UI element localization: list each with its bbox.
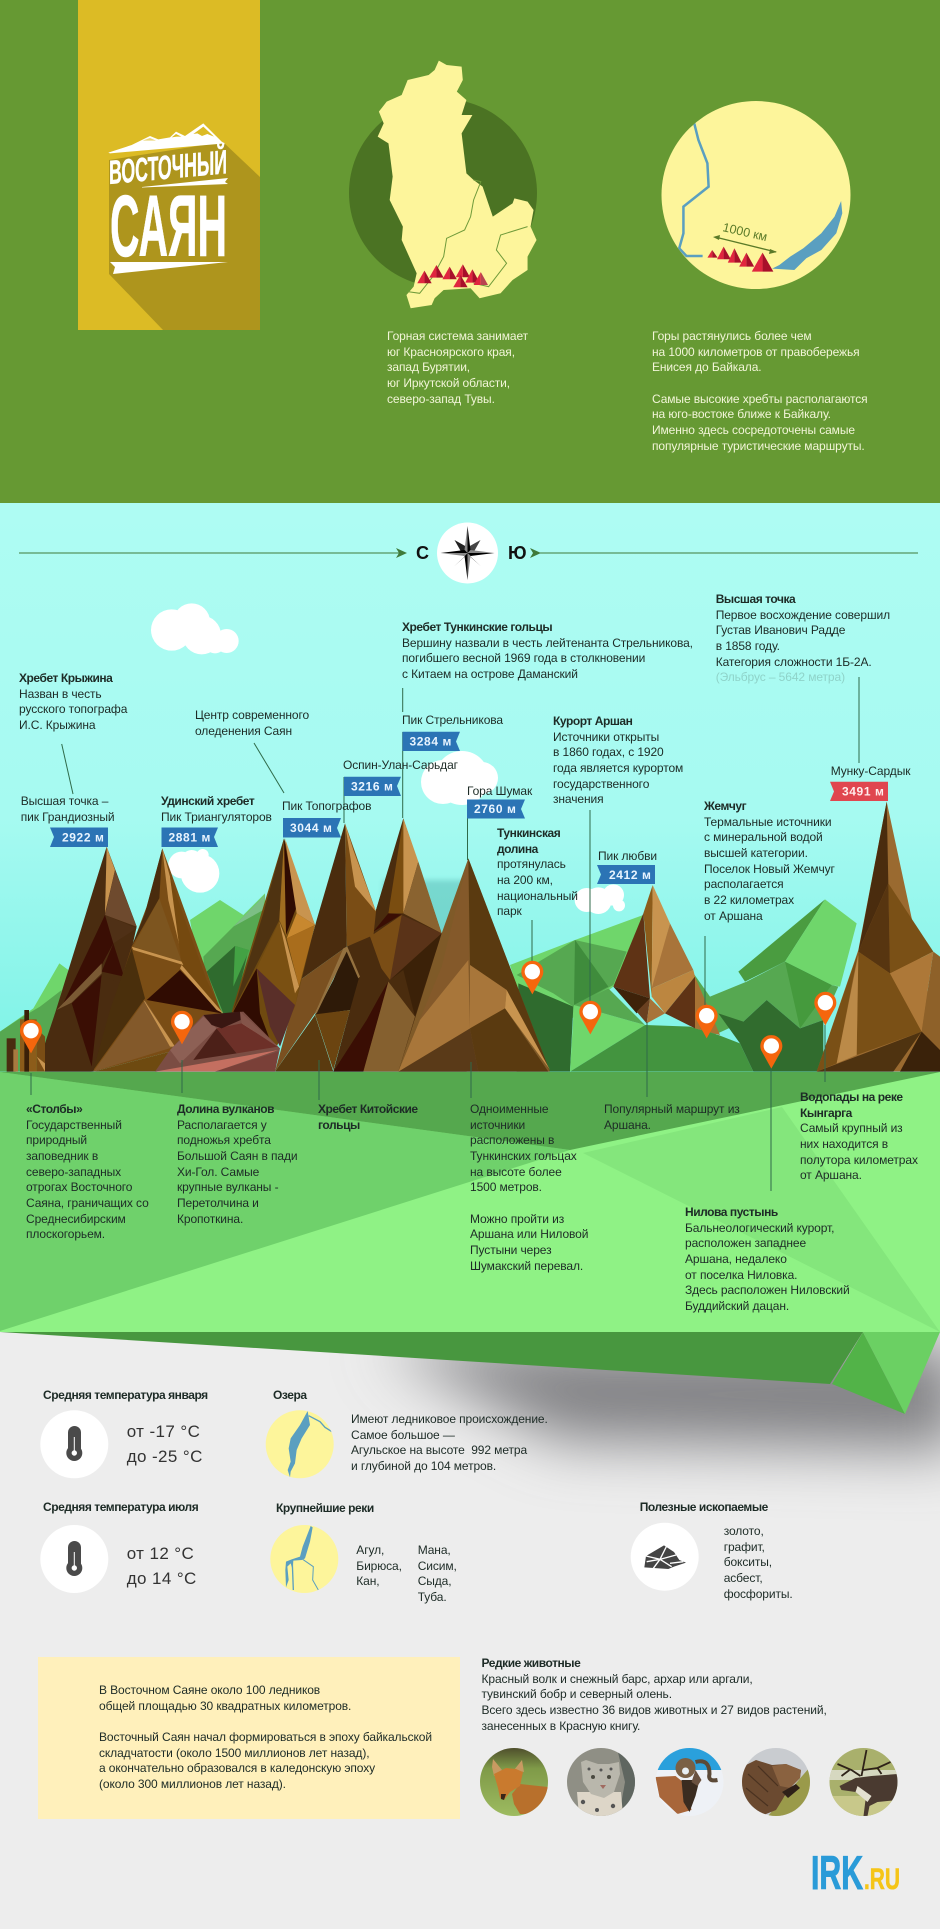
label: Грандиозный: пик Грандиозный — [21, 810, 114, 824]
text: Хребет Тункинские гольцы: с Китаем на острове Даманский — [402, 667, 578, 681]
text: Долина вулканов: Хи-Гол. Самые — [177, 1165, 259, 1179]
icon: lake map — [266, 1410, 334, 1478]
text: Жемчуг: высшей категории. — [704, 846, 808, 860]
text: редкие животные — [482, 1656, 827, 1733]
text: Тункинская долина: национальный — [497, 889, 578, 903]
text: Столбы: плоскогорьем. — [26, 1227, 105, 1241]
text: Водопады на реке Кынгарга — [800, 1090, 918, 1182]
values: январь: до -25 °C — [127, 1447, 203, 1466]
text: редкие животные: Всего здесь известно 36 видов животных и 27 видов растений, — [482, 1703, 827, 1717]
icon: compass rose — [437, 522, 498, 584]
text: Одноименные источники: Аршана или Ниловой — [470, 1227, 588, 1241]
photo: snow leopard — [567, 1748, 635, 1816]
label: Мунку-Сардык: Мунку-Сардык — [831, 764, 910, 778]
text: Хребет Тункинские гольцы: Вершину назвали в честь лейтенанта Стрельникова, — [402, 636, 693, 650]
header text: location: юг Красноярского края, — [387, 345, 515, 359]
icon: route map from Yenisei to Baikal — [662, 101, 850, 289]
header text: location: запад Бурятии, — [387, 360, 470, 374]
text: Одноименные источники: Пустыни через — [470, 1243, 552, 1257]
text: ледники: В Восточном Саяне около 100 ледников — [99, 1683, 320, 1697]
text: Нилова пустынь: Аршана, недалеко — [685, 1252, 787, 1266]
list: ископаемые: графит, — [724, 1540, 765, 1554]
text: Столбы: Саяна, граничащих со — [26, 1196, 149, 1210]
text: Тункинская долина — [497, 826, 578, 918]
list: реки 2: Сыда, — [418, 1574, 452, 1588]
text: Жемчуг: с минеральной водой — [704, 830, 823, 844]
values: январь: от -17 °C — [127, 1422, 200, 1441]
list: ископаемые: золото, — [724, 1524, 764, 1538]
label: Оспин-Улан-Сарьдаг: Оспин-Улан-Сарьдаг — [343, 758, 458, 772]
text: Центр оледенения — [195, 708, 309, 738]
text: Нилова пустынь: расположен западнее — [685, 1236, 806, 1250]
text: Нилова пустынь: Здесь расположен Ниловский — [685, 1283, 850, 1297]
text: озера: Самое большое — — [351, 1428, 455, 1442]
text: Хребет Крыжина: русского топографа — [19, 702, 127, 716]
text: Одноименные источники — [470, 1102, 588, 1273]
text: ледники: складчатости (около 1500 миллионов лет назад), — [99, 1746, 369, 1760]
text: Курорт Аршан: в 1860 годах, с 1920 — [553, 745, 664, 759]
text: ледники: а окончательно образовался в каледонскую эпоху — [99, 1761, 375, 1775]
text: Одноименные источники: расположены в — [470, 1133, 554, 1147]
text: Водопады на реке Кынгарга: Кынгарга — [800, 1106, 852, 1120]
icon: route map from Yenisei to Baikal: 1000 км — [721, 220, 769, 244]
header text: location: юг Иркутской области, — [387, 376, 510, 390]
list: реки 1: Агул, — [356, 1543, 384, 1557]
label: Удинский хребет — [161, 794, 272, 824]
text: ледники: общей площадью 30 квадратных километров. — [99, 1699, 351, 1713]
text: Столбы: Государственный — [26, 1118, 122, 1132]
text: Популярный маршрут: Популярный маршрут из — [604, 1102, 740, 1116]
icon: thermometer July — [40, 1525, 108, 1593]
mountain: Пик Стрельникова — [333, 818, 467, 1072]
photo: reindeer — [830, 1748, 898, 1816]
height flag: 3044 м: 3044 м — [290, 821, 333, 835]
mountain: Пик Топографов — [232, 838, 315, 1047]
values: июль: до 14 °C — [127, 1568, 197, 1588]
list: реки 2 — [418, 1543, 457, 1604]
text: Одноименные источники: 1500 метров. — [470, 1180, 542, 1194]
text: Тункинская долина: долина — [497, 842, 538, 856]
panel: gold title banner — [78, 0, 260, 330]
header text: extent: популярные туристические маршруты. — [652, 439, 865, 453]
text: Жемчуг: располагается — [704, 877, 784, 891]
list: ископаемые: бокситы, — [724, 1555, 772, 1569]
text: редкие животные: Красный волк и снежный барс, архар или аргали, — [482, 1672, 753, 1686]
text: Высшая точка — [716, 592, 890, 684]
title logo: Восточный Саян — [108, 123, 228, 275]
logo: IRK.RU: IRK — [811, 1847, 863, 1900]
text: Водопады на реке Кынгарга: полутора километрах — [800, 1153, 918, 1167]
text: Курорт Аршан: года является курортом — [553, 761, 683, 775]
ground terrain panel — [0, 1072, 940, 1414]
text: Долина вулканов: подножья хребта — [177, 1133, 271, 1147]
text: Нилова пустынь — [685, 1205, 850, 1313]
height flag: 3216 м: 3216 м — [351, 780, 394, 794]
list: ископаемые: фосфориты. — [724, 1587, 793, 1601]
photo: beaver — [742, 1748, 810, 1816]
text: ледники: Восточный Саян начал формироваться в эпоху байкальской — [99, 1730, 432, 1744]
text: редкие животные: тувинский бобр и северный олень. — [482, 1687, 672, 1701]
text: Жемчуг: Жемчуг — [704, 799, 746, 813]
compass direction line — [19, 548, 918, 558]
text: Жемчуг — [704, 799, 835, 923]
label: Пик любви: Пик любви — [598, 849, 657, 863]
text: Нилова пустынь: Бальнеологический курорт, — [685, 1221, 834, 1235]
height flag: 2412 м — [597, 865, 655, 884]
compass letter south: Ю — [508, 543, 526, 563]
values: январь — [126, 1422, 203, 1466]
text: Жемчуг: от Аршана — [704, 909, 763, 923]
text: Водопады на реке Кынгарга: Водопады на реке — [800, 1090, 903, 1104]
mountain: Пик Триангуляторов — [93, 848, 223, 1072]
list: реки 1: Кан, — [356, 1574, 380, 1588]
text: озера: Агульское на высоте 992 метра — [351, 1443, 527, 1457]
icon: minerals rock — [631, 1523, 699, 1591]
text: Курорт Аршан: государственного — [553, 777, 649, 791]
text: озера: и глубиной до 104 метров. — [351, 1459, 496, 1473]
height flag: 2881 м — [162, 828, 218, 847]
list: ископаемые — [724, 1524, 793, 1601]
label: Удинский хребет: Пик Триангуляторов — [161, 810, 272, 824]
height flag: 2922 м — [50, 828, 108, 847]
text: Долина вулканов: крупные вулканы - — [177, 1180, 278, 1194]
text: Долина вулканов: Долина вулканов — [177, 1102, 274, 1116]
text: Хребет Тункинские гольцы: Хребет Тункинские гольцы — [402, 620, 552, 634]
list: реки 2: Мана, — [418, 1543, 451, 1557]
heading: озера: Озера — [273, 1388, 307, 1402]
list: реки 2: Туба. — [418, 1590, 447, 1604]
height flag: 2760 м: 2760 м — [474, 802, 517, 816]
list: ископаемые: асбест, — [724, 1571, 763, 1585]
text: ледники — [99, 1683, 432, 1791]
text: Центр оледенения: оледенения Саян — [195, 724, 292, 738]
text: Долина вулканов: Перетолчина и — [177, 1196, 259, 1210]
text: Нилова пустынь: Буддийский дацан. — [685, 1299, 789, 1313]
text: Столбы: «Столбы» — [26, 1102, 82, 1116]
photo: argali — [656, 1748, 724, 1816]
text: Водопады на реке Кынгарга: от Аршана. — [800, 1168, 862, 1182]
header text: extent: на 1000 километров от правобережья — [652, 345, 860, 359]
label: Гора Шумак: Гора Шумак — [467, 784, 532, 798]
text: Водопады на реке Кынгарга: них находится в — [800, 1137, 888, 1151]
text: Популярный маршрут — [604, 1102, 740, 1132]
header text: extent: Енисея до Байкала. — [652, 360, 762, 374]
text: Тункинская долина: Тункинская — [497, 826, 560, 840]
text: Тункинская долина: протянулась — [497, 857, 566, 871]
height flag: 3284 м — [402, 732, 460, 751]
text: Тункинская долина: парк — [497, 904, 522, 918]
text: Долина вулканов: Располагается у — [177, 1118, 267, 1132]
text: Водопады на реке Кынгарга: Самый крупный из — [800, 1121, 903, 1135]
text: Одноименные источники: Тункинских гольцах — [470, 1149, 577, 1163]
mountain: Мунку-Сардык — [817, 802, 940, 1072]
list: реки 2: Сисим, — [418, 1559, 457, 1573]
text: Курорт Аршан: Курорт Аршан — [553, 714, 632, 728]
text: Хребет Крыжина: Назван в честь — [19, 687, 102, 701]
heading: ископаемые: Полезные ископаемые — [640, 1500, 768, 1514]
text: Высшая точка: Категория сложности 1Б-2А. — [716, 655, 872, 669]
label: Пик Стрельникова: Пик Стрельникова — [402, 713, 503, 727]
text: Долина вулканов: Большой Саян в пади — [177, 1149, 298, 1163]
text: Высшая точка: Густав Иванович Радде — [716, 623, 845, 637]
mountain: Оспин-Улан-Сарьдаг — [275, 823, 387, 1072]
mountain: Пик любви — [613, 885, 720, 1035]
height flag: 2922 м: 2922 м — [62, 830, 105, 844]
height flag: 3491 м — [830, 782, 888, 801]
text: Жемчуг: в 22 километрах — [704, 893, 794, 907]
label: Пик Топографов: Пик Топографов — [282, 799, 371, 813]
text: Столбы — [26, 1102, 149, 1241]
text: Одноименные источники: на высоте более — [470, 1165, 562, 1179]
height flag: 2412 м: 2412 м — [609, 868, 652, 882]
text: Хребет Крыжина: Хребет Крыжина — [19, 671, 112, 685]
icon: thermometer January — [40, 1410, 108, 1478]
volcano — [155, 1012, 280, 1072]
title logo: Восточный Саян: ВОСТОЧНЫЙ — [109, 142, 227, 192]
text: Популярный маршрут: Аршана. — [604, 1118, 651, 1132]
text: Столбы: северо-западных — [26, 1165, 121, 1179]
text: Столбы: Среднесибирским — [26, 1212, 126, 1226]
header text: location — [387, 329, 528, 406]
text: Хребет Тункинские гольцы: погибшего весной 1969 года в столкновении — [402, 651, 645, 665]
text: Высшая точка: Первое восхождение совершил — [716, 608, 890, 622]
text: Одноименные источники: Шумакский перевал. — [470, 1259, 583, 1273]
header text: location: Горная система занимает — [387, 329, 528, 343]
text: Нилова пустынь: Нилова пустынь — [685, 1205, 778, 1219]
height flag: 3284 м: 3284 м — [410, 734, 452, 748]
text: Столбы: заповедник в — [26, 1149, 98, 1163]
text: Одноименные источники: источники — [470, 1118, 525, 1132]
text: Жемчуг: Поселок Новый Жемчуг — [704, 862, 835, 876]
panel: green header background — [0, 0, 940, 503]
text: Курорт Аршан: Источники открыты — [553, 730, 659, 744]
text: Курорт Аршан: значения — [553, 792, 604, 806]
header text: extent: Самые высокие хребты располагаются — [652, 392, 868, 406]
text: Тункинская долина: на 200 км, — [497, 873, 553, 887]
text: Высшая точка: Высшая точка — [716, 592, 795, 606]
label: Грандиозный — [21, 794, 114, 824]
list: реки 1: Бирюса, — [356, 1559, 402, 1573]
clouds — [151, 603, 625, 914]
text: САЯН — [110, 178, 227, 275]
header text: extent: на юго-востоке ближе к Байкалу. — [652, 407, 831, 421]
height flag: 3044 м — [283, 818, 341, 838]
text: озера — [351, 1412, 548, 1473]
background hills left — [0, 880, 467, 1072]
text: Одноименные источники: Одноименные — [470, 1102, 548, 1116]
map pins — [20, 961, 836, 1069]
height flag: 3491 м: 3491 м — [842, 784, 885, 798]
height flag: 3216 м — [344, 777, 401, 796]
heading: июль: Средняя температура июля — [43, 1500, 198, 1514]
background hills right — [510, 899, 857, 1072]
panel: sky background — [0, 503, 940, 1073]
logo: IRK.RU: .RU — [864, 1863, 900, 1896]
text: Курорт Аршан — [553, 714, 683, 806]
panel: yellow glaciers note — [38, 1657, 460, 1819]
text: Хребет Китойские гольцы: Хребет Китойские — [318, 1102, 418, 1116]
label: Удинский хребет: Удинский хребет — [161, 794, 254, 808]
height flag: 2881 м: 2881 м — [168, 830, 211, 844]
text: Одноименные источники: Можно пройти из — [470, 1212, 564, 1226]
header text: extent: Именно здесь сосредоточены самые — [652, 423, 855, 437]
text: Долина вулканов: Кропоткина. — [177, 1212, 243, 1226]
text: редкие животные: Редкие животные — [482, 1656, 580, 1670]
text: Высшая точка: (Эльбрус – 5642 метра) — [716, 670, 845, 684]
leader lines — [31, 677, 859, 1191]
label: Грандиозный: Высшая точка – — [21, 794, 108, 808]
header text: extent — [652, 329, 868, 453]
text: Долина вулканов — [177, 1102, 298, 1226]
text: редкие животные: занесенных в Красную книгу. — [482, 1719, 640, 1733]
values: июль — [126, 1544, 197, 1588]
icon: rivers map — [270, 1525, 338, 1593]
heading: январь: Средняя температура января — [43, 1388, 208, 1402]
mountain: Гора Шумак — [398, 858, 550, 1072]
values: июль: от 12 °C — [127, 1544, 194, 1562]
text: Центр оледенения: Центр современного — [195, 708, 309, 722]
height flag: 2760 м — [467, 800, 525, 818]
Столбы rocks — [7, 1010, 45, 1072]
text: Высшая точка: в 1858 году. — [716, 639, 780, 653]
text: Столбы: природный — [26, 1133, 87, 1147]
photo: red wolf — [480, 1748, 548, 1816]
list: реки 1 — [356, 1543, 402, 1588]
drop shadow under terrain — [380, 1345, 940, 1450]
text: Хребет Крыжина: И.С. Крыжина — [19, 718, 95, 732]
text: Хребет Китойские гольцы — [318, 1102, 418, 1132]
compass letter north: С — [416, 543, 429, 563]
heading: реки: Крупнейшие реки — [276, 1501, 374, 1515]
mountain: Пик Грандиозный — [45, 847, 137, 1072]
text: ледники: (около 300 миллионов лет назад). — [99, 1777, 286, 1791]
text: Нилова пустынь: от поселка Ниловка. — [685, 1268, 797, 1282]
header text: extent: Горы растянулись более чем — [652, 329, 812, 343]
text: Хребет Тункинские гольцы — [402, 620, 693, 681]
text: Хребет Крыжина — [19, 671, 128, 732]
text: Жемчуг: Термальные источники — [704, 815, 831, 829]
text: озера: Имеют ледниковое происхождение. — [351, 1412, 548, 1426]
text: Хребет Китойские гольцы: гольцы — [318, 1118, 360, 1132]
icon: Krasnoyarsk region map with mountains — [349, 61, 537, 308]
text: Столбы: отрогах Восточного — [26, 1180, 132, 1194]
header text: location: северо-запад Тувы. — [387, 392, 495, 406]
